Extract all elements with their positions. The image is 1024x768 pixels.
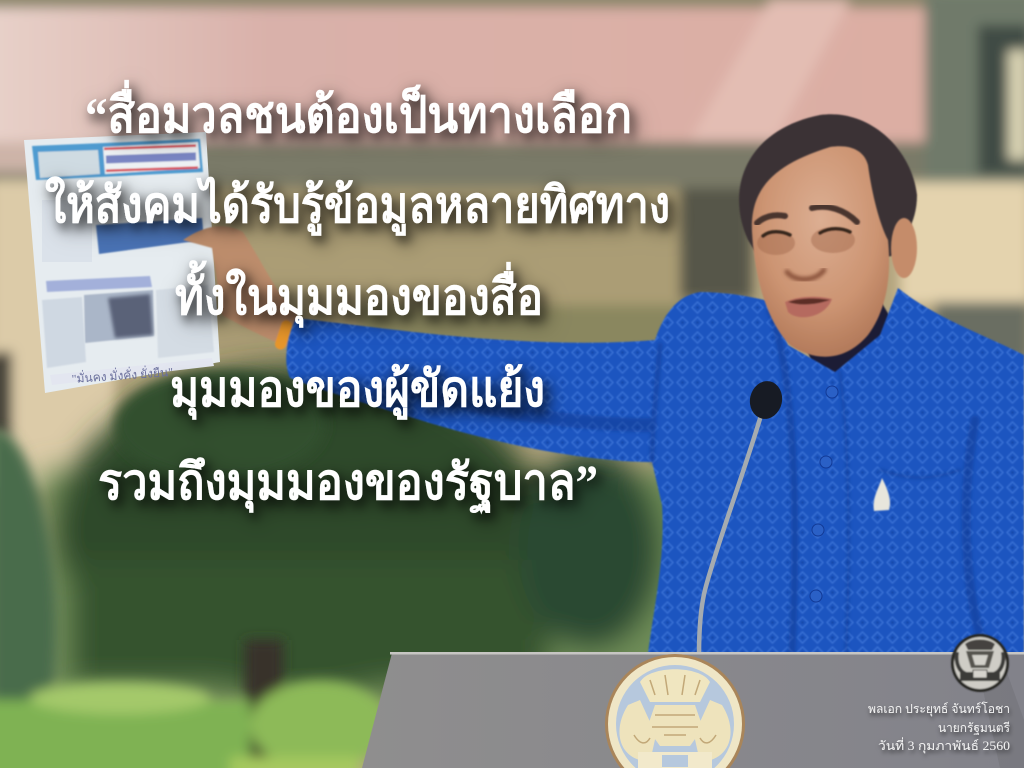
- podium seal: [605, 654, 745, 768]
- attribution name: พลเอก ประยุทธ์ จันทร์โอชา: [868, 701, 1010, 717]
- quote line 5: รวมถึงมุมมองของรัฐบาล”: [98, 454, 598, 514]
- quote line 1: “สื่อมวลชนต้องเป็นทางเลือก: [85, 80, 632, 143]
- newspaper photos and columns: "มั่นคง มั่งคั่ง ยั่งยืน": [71, 363, 174, 386]
- attribution: [868, 701, 1010, 754]
- quote line 2: ให้สังคมได้รับรู้ข้อมูลหลายทิศทาง: [45, 176, 670, 236]
- eyes: [757, 227, 855, 255]
- eyebrows: [757, 207, 857, 223]
- attribution date: วันที่ 3 กุมภาพันธ์ 2560: [878, 737, 1010, 754]
- quote line 4: มุมมองของผู้ขัดแย้ง: [170, 361, 545, 420]
- main quote: [45, 80, 670, 514]
- hand and wrist: [183, 226, 300, 351]
- lapel pin: [874, 478, 890, 511]
- person: neck: [800, 300, 892, 385]
- newspaper masthead: [32, 139, 203, 180]
- podium: [362, 652, 1024, 768]
- seal lions: [619, 700, 731, 762]
- nose: [787, 270, 824, 279]
- person: face: [752, 146, 889, 357]
- quote line 3: ทั้งในมุมมองของสื่อ: [175, 260, 543, 328]
- newspaper held up: [24, 132, 220, 393]
- seal crown: [640, 669, 710, 702]
- attribution title: นายกรัฐมนตรี: [938, 721, 1010, 735]
- person: suit: [286, 288, 1024, 720]
- microphone: [699, 378, 786, 655]
- person: head back hair: [739, 114, 917, 260]
- mouth: [785, 297, 832, 317]
- government emblem badge: [951, 634, 1009, 692]
- suit buttons: [810, 386, 838, 602]
- person: ear: [891, 218, 917, 278]
- seal bowl: [647, 705, 703, 746]
- newspaper photos and columns: [42, 200, 214, 386]
- suit shading folds: [400, 310, 985, 652]
